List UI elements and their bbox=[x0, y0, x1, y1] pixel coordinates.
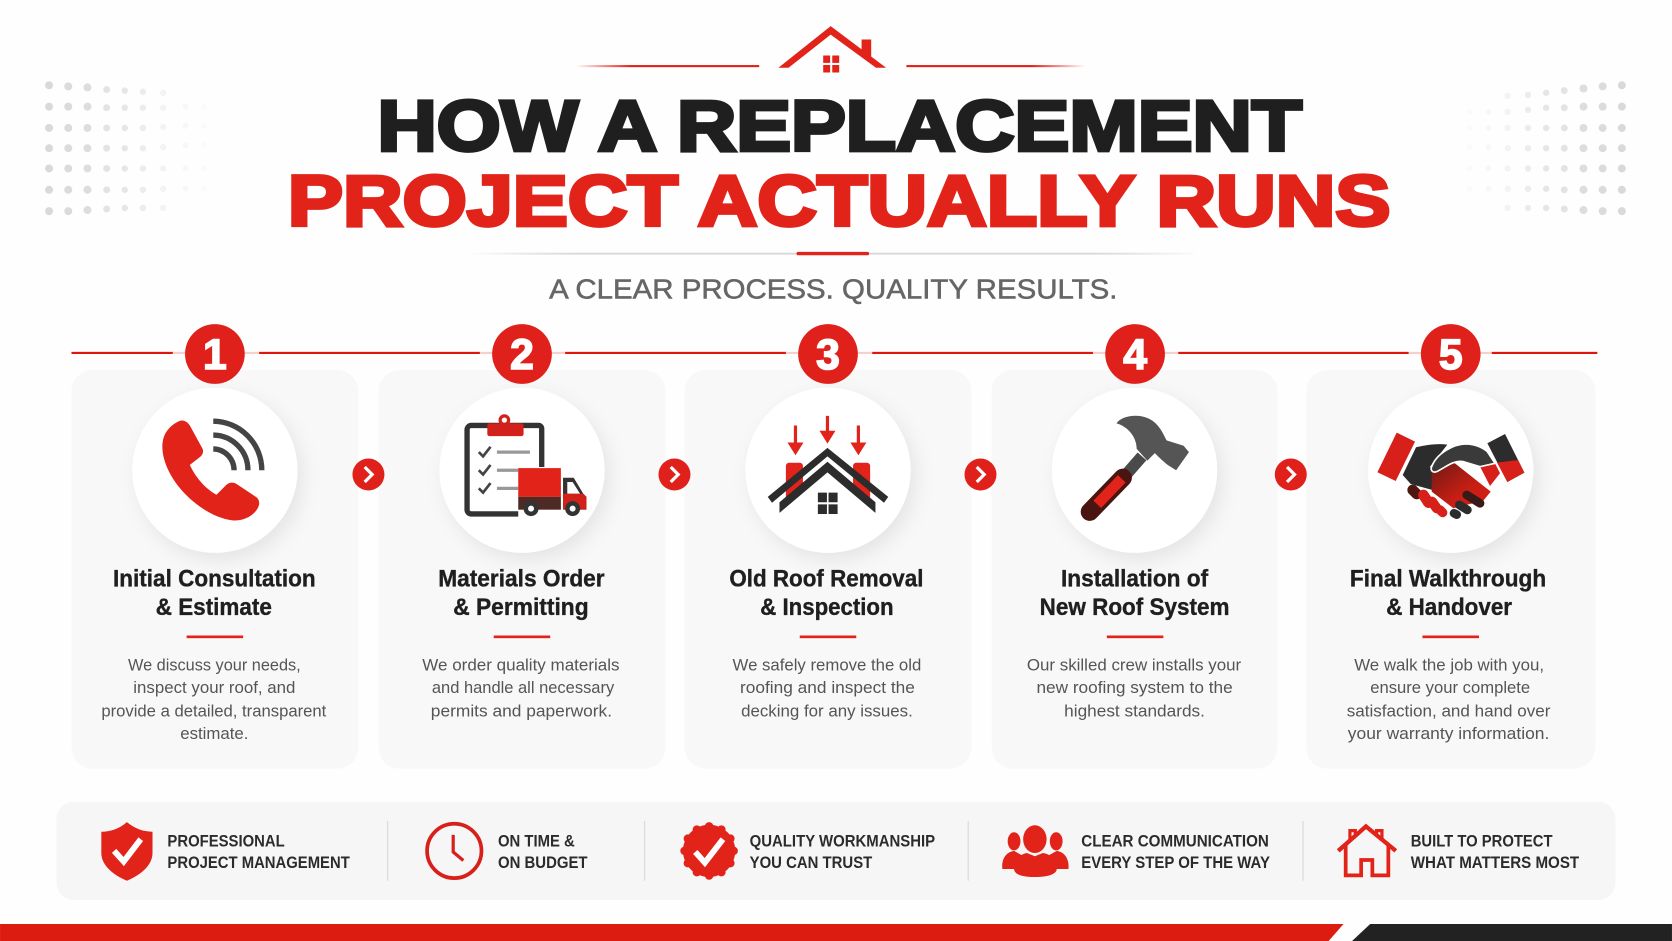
step 3 title: Old Roof Removal bbox=[729, 565, 923, 592]
step 2 title bbox=[438, 565, 605, 621]
step 2 title: & Permitting bbox=[453, 594, 589, 621]
title: PROJECT ACTUALLY RUNS bbox=[288, 161, 1390, 241]
icon: roof removal bbox=[768, 416, 888, 514]
step 5 title bbox=[1350, 565, 1546, 621]
step 4 text: highest standards. bbox=[1064, 702, 1205, 721]
number badge 4 bbox=[1105, 324, 1165, 384]
step 2 title: Materials Order bbox=[438, 565, 605, 592]
step 2 text: and handle all necessary bbox=[432, 678, 615, 697]
dot pattern: right bbox=[1469, 85, 1622, 211]
benefit: project management bbox=[101, 822, 350, 881]
title: HOW A REPLACEMENT bbox=[377, 87, 1302, 167]
icon: clipboard and truck bbox=[467, 416, 586, 516]
step 4 card bbox=[992, 370, 1277, 769]
number badge 1: 1 bbox=[203, 331, 227, 379]
title divider bbox=[469, 252, 1200, 255]
step 1 text: inspect your roof, and bbox=[133, 678, 295, 697]
step 3 text: roofing and inspect the bbox=[740, 678, 915, 697]
step 1 text: provide a detailed, transparent bbox=[101, 702, 327, 721]
arrow 4 to 5 bbox=[1275, 459, 1307, 490]
step 3 text: We safely remove the old bbox=[733, 656, 921, 675]
step 4 title bbox=[1040, 565, 1229, 621]
step 1 text: We discuss your needs, bbox=[128, 656, 301, 675]
number badge 5: 5 bbox=[1439, 331, 1463, 379]
step 1 card bbox=[71, 370, 358, 769]
step 5 title: & Handover bbox=[1386, 594, 1512, 621]
step 3 text bbox=[733, 656, 921, 721]
step 2 text: permits and paperwork. bbox=[431, 702, 612, 721]
step 5 text: We walk the job with you, bbox=[1354, 656, 1544, 675]
header roof emblem bbox=[576, 26, 1086, 73]
arrow 3 to 4 bbox=[964, 459, 996, 490]
step 2 text: We order quality materials bbox=[422, 656, 620, 675]
step 2 card bbox=[379, 370, 665, 769]
number badge 2: 2 bbox=[510, 331, 534, 379]
step 1 text: estimate. bbox=[180, 724, 248, 743]
step 4 title: Installation of bbox=[1061, 565, 1209, 592]
step 3 card bbox=[685, 370, 971, 769]
benefit: quality: YOU CAN TRUST bbox=[750, 853, 872, 872]
benefit: on time bbox=[427, 824, 588, 878]
step 5 text bbox=[1347, 656, 1551, 743]
dot pattern: left bbox=[49, 85, 204, 211]
benefit: communication bbox=[1002, 825, 1270, 877]
benefit: communication: EVERY STEP OF THE WAY bbox=[1081, 853, 1270, 872]
step 1 title bbox=[113, 565, 316, 621]
icon: phone bbox=[162, 420, 262, 520]
number badge 4: 4 bbox=[1123, 331, 1147, 379]
step 3 title: & Inspection bbox=[760, 594, 894, 621]
step 5 text: your warranty information. bbox=[1348, 724, 1549, 743]
number badge 2 bbox=[492, 324, 552, 384]
benefit: protect home: WHAT MATTERS MOST bbox=[1411, 853, 1579, 872]
panel: benefits strip bbox=[57, 802, 1615, 900]
step 4 text: Our skilled crew installs your bbox=[1027, 656, 1242, 675]
number badge 3 bbox=[798, 324, 858, 384]
footer bar bbox=[0, 924, 1672, 941]
step 3 text: decking for any issues. bbox=[741, 702, 913, 721]
step 4 text bbox=[1027, 656, 1242, 721]
benefit: communication: CLEAR COMMUNICATION bbox=[1081, 832, 1269, 851]
step 1 title: Initial Consultation bbox=[113, 565, 316, 592]
number badge 3: 3 bbox=[816, 331, 840, 379]
step 1 text bbox=[101, 656, 327, 743]
timeline line bbox=[71, 352, 1597, 354]
benefit: project management: PROFESSIONAL bbox=[167, 832, 285, 851]
arrow 2 to 3 bbox=[658, 459, 690, 490]
icon: handshake bbox=[1377, 433, 1524, 515]
subtitle: A CLEAR PROCESS. QUALITY RESULTS. bbox=[549, 274, 1118, 305]
step 5 title: Final Walkthrough bbox=[1350, 565, 1546, 592]
benefit: on time: ON BUDGET bbox=[498, 853, 588, 872]
icon: hammer bbox=[1090, 416, 1189, 512]
step 4 title: New Roof System bbox=[1040, 594, 1229, 621]
number badge 1 bbox=[185, 324, 245, 384]
benefit: protect home: BUILT TO PROTECT bbox=[1411, 832, 1553, 851]
step 4 text: new roofing system to the bbox=[1036, 678, 1233, 697]
benefit: on time: ON TIME & bbox=[498, 832, 575, 851]
step 5 text: ensure your complete bbox=[1370, 678, 1530, 697]
step 5 text: satisfaction, and hand over bbox=[1347, 702, 1551, 721]
step 3 title bbox=[729, 565, 923, 621]
step 2 text bbox=[422, 656, 620, 721]
arrow 1 to 2 bbox=[352, 459, 384, 490]
benefit: protect home bbox=[1338, 826, 1579, 875]
step 1 title: & Estimate bbox=[156, 594, 272, 621]
title bbox=[288, 87, 1390, 241]
step 5 card bbox=[1306, 370, 1595, 769]
benefit: quality bbox=[683, 825, 935, 877]
benefit: project management: PROJECT MANAGEMENT bbox=[167, 853, 350, 872]
benefit: quality: QUALITY WORKMANSHIP bbox=[750, 832, 935, 851]
number badge 5 bbox=[1421, 324, 1481, 384]
